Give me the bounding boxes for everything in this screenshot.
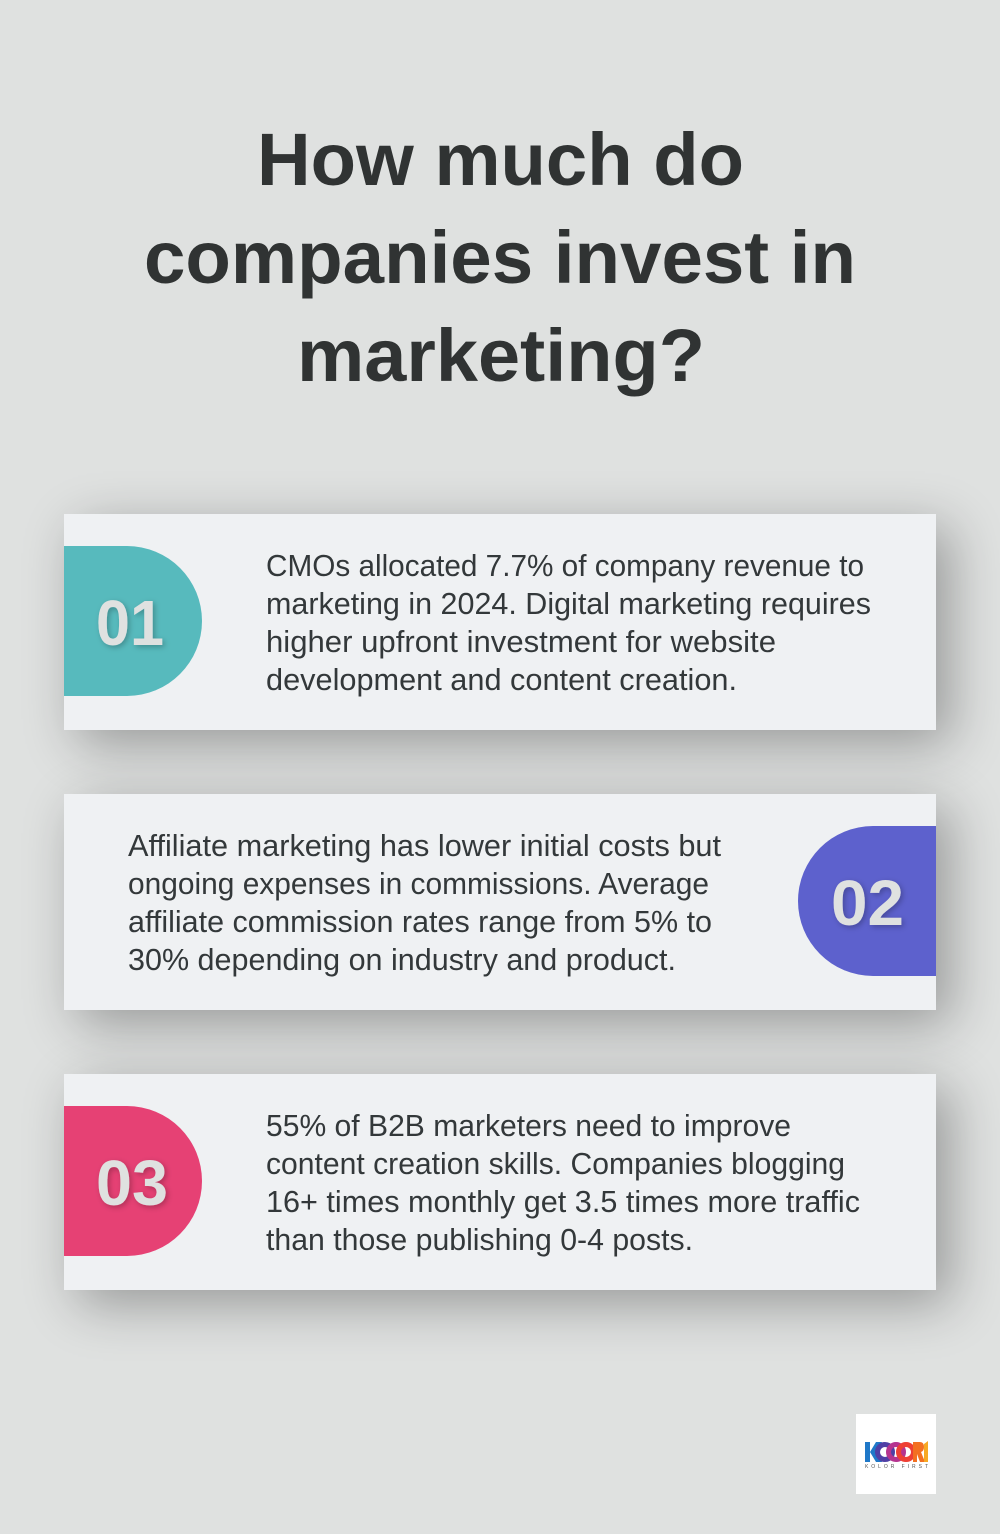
badge: 02: 02 (831, 867, 904, 939)
title: How much do (257, 118, 744, 201)
text block: card 1: marketing in 2024. Digital marketing requires (266, 587, 871, 621)
badge: 01: 01 (96, 587, 164, 659)
badge: 02 (798, 826, 936, 976)
title: marketing? (297, 314, 705, 397)
text block: card 3 (266, 1109, 860, 1257)
text block: card 2: ongoing expenses in commissions. Average (128, 867, 709, 901)
panel: card 1 background (64, 514, 936, 730)
panel: card 3 background (64, 1074, 936, 1290)
badge: 01 (64, 546, 202, 696)
title: companies invest in (144, 216, 856, 299)
panel: card 2 background (64, 794, 936, 1010)
text block: card 3: 16+ times monthly get 3.5 times more traffic (266, 1185, 860, 1219)
text block: card 2 (128, 829, 722, 977)
logo: KOORI Kolor First: KOLOR FIRST (865, 1464, 928, 1470)
text block: card 1: development and content creation. (266, 663, 737, 697)
badge: 03: 03 (96, 1147, 168, 1219)
text block: card 1: higher upfront investment for website (266, 625, 776, 659)
text block: card 3: 55% of B2B marketers need to improve (266, 1109, 791, 1143)
text block: card 2: Affiliate marketing has lower initial costs but (128, 829, 722, 863)
text block: card 2: 30% depending on industry and product. (128, 943, 676, 977)
text block: card 3: content creation skills. Companies blogging (266, 1147, 845, 1181)
text block: card 1: CMOs allocated 7.7% of company revenue to (266, 549, 864, 583)
text block: card 3: than those publishing 0-4 posts. (266, 1223, 693, 1257)
badge: 03 (64, 1106, 202, 1256)
text block: card 2: affiliate commission rates range from 5% to (128, 905, 712, 939)
text block: card 1 (266, 549, 871, 697)
title (144, 118, 856, 397)
logo: KOORI Kolor First (856, 1414, 936, 1494)
